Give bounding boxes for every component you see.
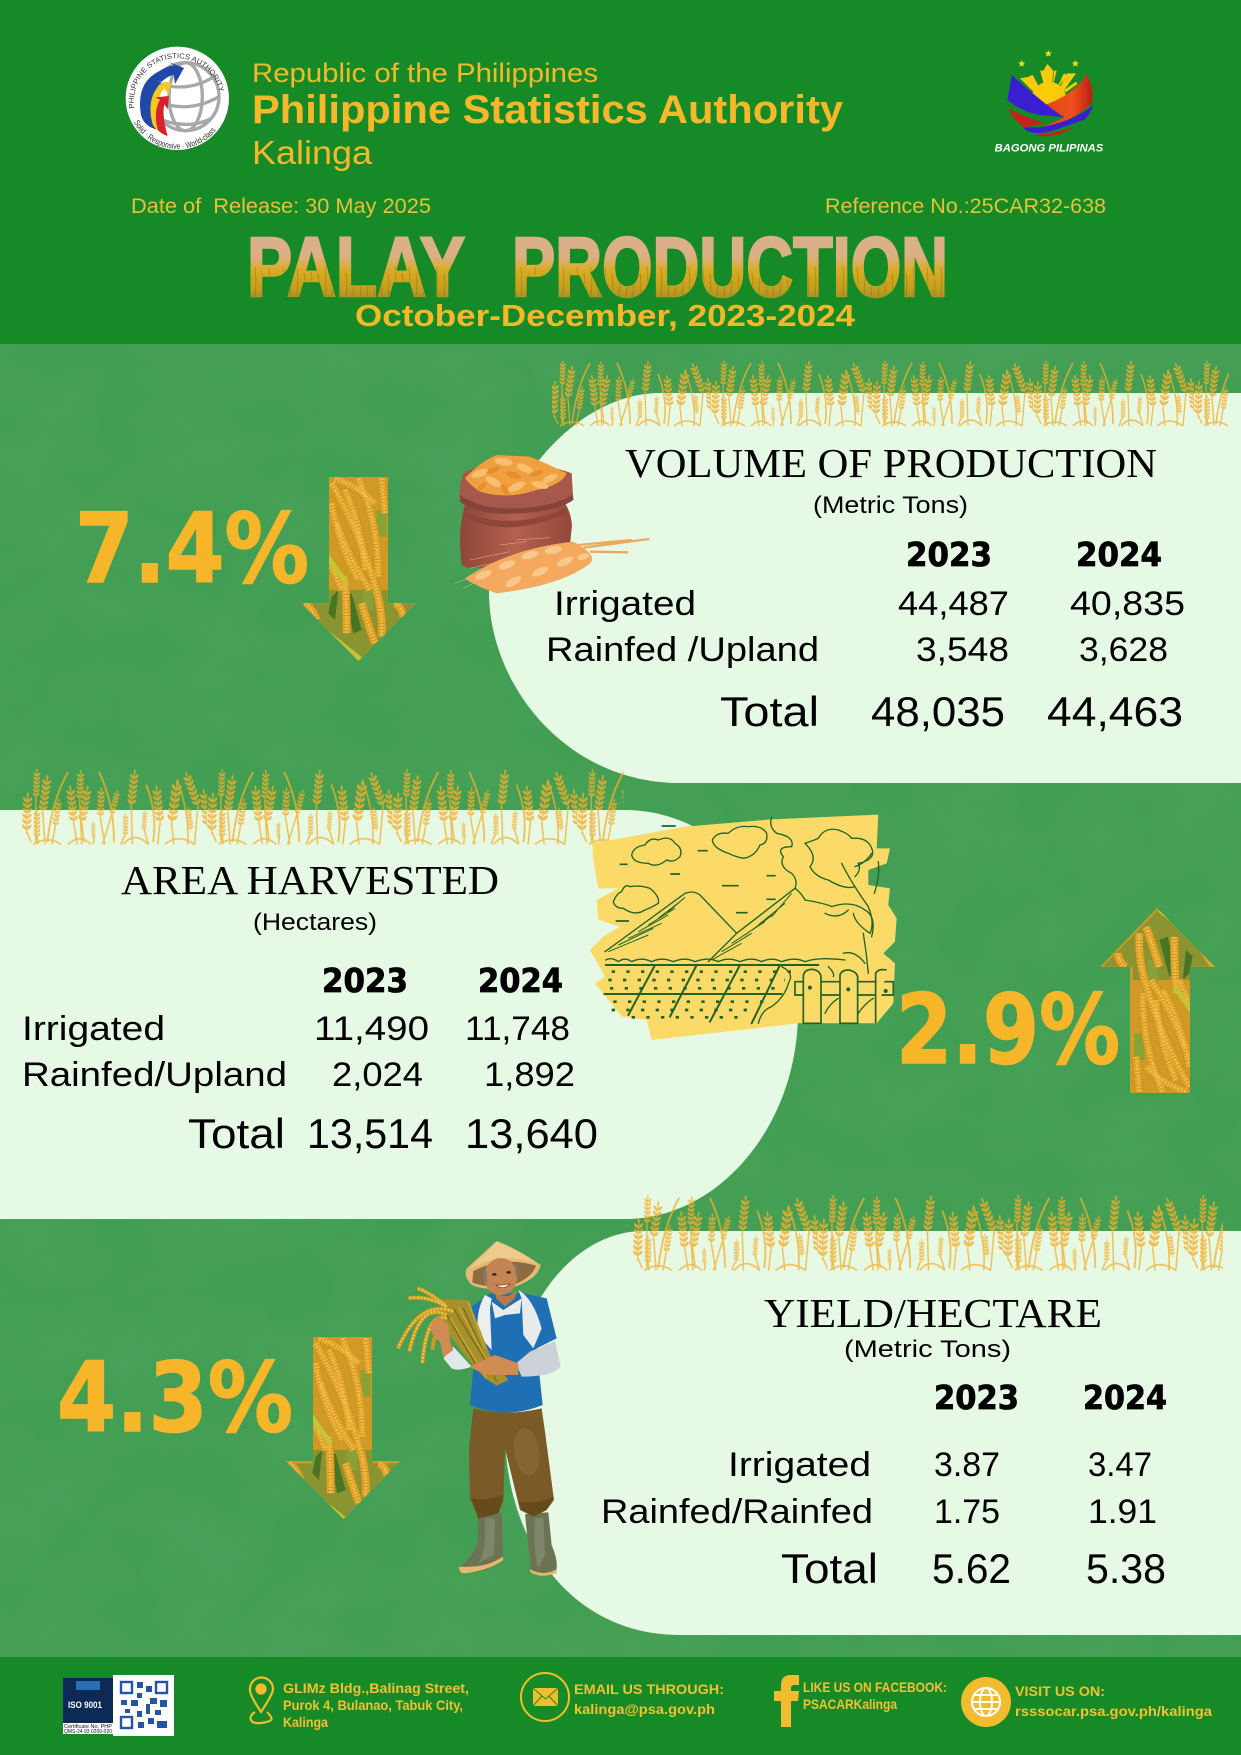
wheat border [22,762,623,846]
data table [546,535,1185,735]
data table: 1,892 [484,1056,575,1094]
data table: 2024 [478,961,563,1000]
percent: 7.4%: 7.4% [75,493,309,605]
release date: Date of Release: 30 May 2025 [131,195,431,218]
icon: envelope [521,1673,569,1721]
data table: 48,035 [871,688,1005,735]
header band [0,0,1241,344]
main title: PRODUCTION [512,220,948,314]
data table: Total [720,688,819,735]
header text [252,58,844,171]
data table: 3,548 [916,631,1009,669]
icon: location pin [250,1678,273,1723]
reference number: Reference No.:25CAR32-638 [825,195,1106,218]
footer: facebook: PSACARKalinga [803,1696,897,1712]
footer: email [521,1673,724,1721]
header text: Republic of the Philippines [252,58,598,88]
data table: 13,640 [465,1110,598,1157]
data table: Total [781,1545,878,1592]
main title: PALAY [247,220,465,314]
data table: Total [188,1110,285,1157]
footer: ISO badge and QR code [63,1675,174,1736]
heading: YIELD/HECTARE [764,1290,1102,1336]
data table: 5.38 [1086,1545,1166,1592]
main title: PALAY [247,220,465,314]
data table: Irrigated [554,585,696,623]
unit: (Metric Tons) [813,492,968,519]
footer: email: kalinga@psa.gov.ph [574,1701,715,1717]
data table: Irrigated [22,1010,165,1048]
footer band [0,1657,1241,1755]
icon: sack of grain with wheat [455,455,649,593]
data table: 1.91 [1088,1493,1157,1531]
header text: Philippine Statistics Authority [252,88,844,132]
data table: 3,628 [1079,631,1168,669]
heading: VOLUME OF PRODUCTION [625,440,1157,486]
data table: 13,514 [307,1110,433,1157]
data table: 40,835 [1070,585,1185,623]
subtitle: October-December, 2023-2024 [355,298,856,333]
footer: ISO badge and QR code: Certificate No. PHP [64,1724,113,1730]
footer: address: Purok 4, Bulanao, Tabuk City, [283,1697,463,1713]
icon: globe [961,1677,1011,1727]
footer: website: rsssocar.psa.gov.ph/kalinga [1015,1703,1212,1719]
icon: farm landscape sketch [590,815,897,1040]
footer: facebook [774,1675,947,1727]
panel: area harvested [0,762,798,1219]
footer: website: VISIT US ON: [1015,1683,1105,1699]
heading: AREA HARVESTED [121,857,499,903]
footer: address: Kalinga [283,1714,328,1730]
footer: website [961,1677,1212,1727]
icon: facebook f [774,1675,799,1727]
footer: address [250,1678,469,1730]
data table: Rainfed/Upland [22,1056,287,1094]
data table: 2,024 [332,1056,423,1094]
textured green background [0,344,1241,1657]
data table: 5.62 [932,1545,1011,1592]
icon: farmer holding rice [398,1241,561,1576]
panel: yield per hectare [505,1188,1241,1635]
data table: 44,463 [1047,688,1183,735]
unit: (Metric Tons) [844,1336,1011,1363]
Bagong Pilipinas logo: BAGONG PILIPINAS [995,142,1103,154]
data table: Irrigated [728,1446,871,1484]
data table [601,1378,1167,1592]
percent: 4.3%: 4.3% [57,1342,293,1454]
Bagong Pilipinas logo [995,50,1103,154]
footer: address: GLIMz Bldg.,Balinag Street, [283,1680,469,1696]
data table: 2023 [322,961,408,1000]
data table: 2024 [1076,535,1162,574]
arrow: down, 7.4% [301,477,416,661]
data table: 2023 [934,1378,1019,1417]
data table: Rainfed/Rainfed [601,1493,873,1531]
header text: Kalinga [252,134,373,171]
unit: (Hectares) [253,909,377,936]
data table: 3.87 [934,1446,1000,1484]
data table: 11,748 [465,1010,570,1048]
main title: PRODUCTION [512,220,948,314]
main title [247,220,948,314]
footer: email: EMAIL US THROUGH: [574,1681,724,1697]
PSA logo [126,46,229,150]
percent: 2.9%: 2.9% [896,974,1120,1086]
footer: ISO badge and QR code: QMS-24 93 0200-020 [64,1729,112,1735]
data table: Rainfed /Upland [546,631,819,669]
footer: ISO badge and QR code: ISO 9001 [68,1700,102,1710]
wheat border [633,1188,1223,1272]
PSA logo: PHILIPPINE STATISTICS AUTHORITY [128,53,224,108]
panel shape [0,810,798,1219]
data table [22,961,598,1157]
arrow: up, 2.9% [1100,908,1215,1093]
data table: 1.75 [934,1493,1000,1531]
panel: volume of production [489,355,1241,783]
arrow: down, 4.3% [286,1337,400,1519]
data table: 3.47 [1088,1446,1152,1484]
data table: 44,487 [898,585,1009,623]
PSA logo: Solid · Responsive · World-class [134,120,216,149]
data table: 2024 [1083,1378,1167,1417]
panel shape [489,393,1241,783]
footer: facebook: LIKE US ON FACEBOOK: [803,1679,947,1695]
wheat border [552,355,1229,428]
panel shape [505,1231,1241,1635]
data table: 11,490 [314,1010,429,1048]
data table: 2023 [906,535,992,574]
